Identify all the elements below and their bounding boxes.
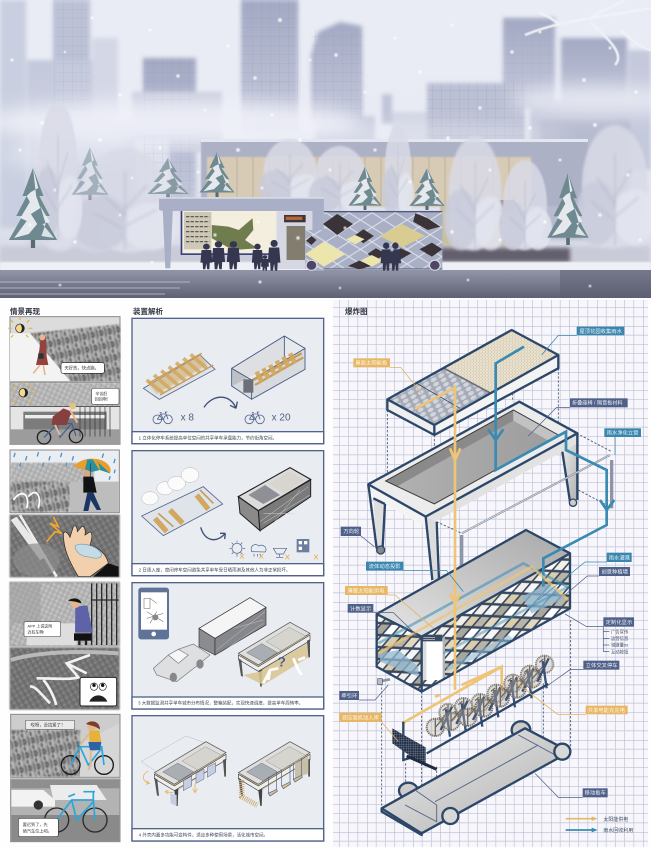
label: film solar: 薄膜太阳能供电 — [347, 586, 385, 594]
label: stacked parking: 立体交叉停车 — [586, 661, 618, 669]
comic: broken bike — [10, 648, 119, 709]
label: count display — [348, 604, 373, 613]
container body with lattice facade — [377, 530, 570, 692]
label: film solar — [345, 586, 388, 595]
label: mobile flatbed: 移动板车 — [585, 789, 607, 797]
panel 4: convertible components: 4 外壳内置多功能可变构件，适应多种使用场景，活化城市空间。 — [139, 832, 268, 839]
rain purification pipe — [462, 455, 612, 567]
panel 1: stacked parking: x 8 — [181, 412, 194, 423]
panel 3: truck scheduling: ? — [277, 654, 286, 670]
rainwater pipeline (blue) — [378, 347, 614, 653]
label: roof garden: 屋顶花园收集雨水 — [579, 327, 623, 335]
snowy kerb and road — [0, 262, 651, 298]
comic: hot day bike row — [8, 317, 120, 381]
comic: girl riding blue bike — [11, 714, 120, 777]
label: custom display with list: 定制化显示 — [606, 618, 632, 626]
projection dashes — [382, 368, 612, 833]
long background building — [201, 139, 588, 253]
label: shared charging: 共享电能充充电 — [588, 706, 626, 714]
snow trees and hedge — [0, 102, 651, 264]
panel: exploded view background grid — [333, 300, 648, 847]
comic column 1 and 2 — [8, 317, 120, 577]
falling snowflakes — [10, 16, 641, 289]
label: roof solar panel: 屋面太阳能板 — [355, 359, 388, 367]
label: hydraulic pump: 液压泵机动入库 — [342, 713, 380, 721]
label: traction hook — [339, 691, 359, 700]
label: rain purification: 雨水净化立管 — [607, 429, 639, 437]
label: custom display with list: 骑蹭量xx — [611, 642, 629, 649]
label: roof solar panel — [353, 358, 390, 367]
legend — [566, 816, 633, 834]
label: rain purification — [604, 428, 641, 437]
panel 2: indoor storage — [132, 451, 324, 576]
rooftop slab with solar and garden — [387, 330, 558, 435]
middle frame: shelter roof shell — [368, 402, 577, 580]
label: custom display with list — [603, 617, 634, 655]
comic: man with app: 近有车啊! — [27, 629, 44, 635]
bike rack with stacked bikes — [378, 656, 553, 769]
label: mobile flatbed — [583, 788, 608, 797]
label: universal wheel: 万向轮 — [343, 527, 360, 535]
panel 2: indoor storage: 2 日逐入库，密闭停车空间避免共享单车受日晒雨淋及其他人为非正常损坏。 — [139, 566, 290, 573]
comic: wet bike seat and hand — [10, 515, 119, 577]
label: rain irrigation — [607, 553, 632, 562]
label: shared charging — [586, 706, 628, 714]
label: custom display with list: 运营信息 — [611, 635, 629, 642]
comic: cyclist in heat — [10, 381, 120, 444]
panel 1: stacked parking — [132, 318, 324, 444]
solar power pipeline (yellow) — [378, 387, 568, 723]
panel 1: stacked parking: 1 立体化停车系统提高单位空间的共享单车承载能力，节约街角空间。 — [139, 434, 277, 441]
heading: exploded view: 爆炸图 — [345, 306, 368, 316]
comic: girl riding blue bike: 哎呀，没拉紧了！ — [31, 722, 65, 729]
device analysis panels — [132, 318, 324, 576]
comic: rain and wet bikes — [10, 450, 119, 513]
label: fluid projection: 流体动态投影 — [369, 562, 401, 570]
label: custom display with list: 互动按钮 — [611, 648, 629, 655]
label: planting wall — [599, 567, 630, 576]
comic: bike parked in car space: 骑汽车位上吧。 — [23, 827, 52, 833]
panel 3: truck scheduling: 3 大数据监测共享单车城市分布情况，整箱装配，实现快速调度，提高单车周转率。 — [138, 699, 303, 706]
label: count display: 计数显示 — [350, 604, 371, 612]
panel: scene recreation comics heading: 情景再现 — [10, 306, 40, 316]
leader lines — [359, 335, 615, 797]
label: roof garden — [577, 327, 624, 335]
comic: bike parked in car space — [11, 779, 120, 842]
label: planting wall: 创意种植墙 — [601, 567, 629, 575]
comic: cyclist in heat: 辛苦赶 — [95, 390, 107, 396]
label: folding seats — [570, 398, 628, 407]
comic: cyclist in heat: 回回啊！ — [95, 397, 111, 402]
branches at top right — [525, 0, 651, 65]
silhouettes of people waiting — [200, 240, 401, 271]
label: fluid projection — [366, 562, 403, 571]
legend: 雨水回收利用 — [603, 827, 633, 834]
label: universal wheel — [341, 527, 361, 536]
label: folding seats: 折叠座椅 / 隔音板衬料 — [572, 399, 623, 407]
comic: man with app: APP 上说这附 — [27, 623, 52, 629]
panel 3: truck scheduling — [132, 583, 324, 709]
bus-stop style bike shelter — [159, 197, 442, 271]
patterned container with diamond panels — [305, 211, 442, 270]
comic: bike parked in car space: 要迟到了，先 — [23, 821, 48, 827]
panel: device analysis heading: 装置解析 — [133, 306, 163, 316]
comic: hot day bike row: 天好热，快点跑。 — [64, 365, 99, 372]
comic: man with app — [10, 582, 119, 646]
label: hydraulic pump — [339, 713, 382, 722]
exploded axonometric drawing — [339, 327, 641, 835]
label: custom display with list: 广告宣传 — [611, 628, 629, 635]
panel 1: stacked parking: x 20 — [272, 412, 291, 423]
moving flatbed platform — [382, 721, 570, 835]
panel 4: convertible components — [132, 716, 324, 841]
label: traction hook: 牵引环 — [341, 691, 358, 699]
label: stacked parking — [583, 661, 619, 670]
hero scene: snowy city street with bike shelter — [0, 0, 651, 298]
label: rain irrigation: 雨水灌溉 — [609, 553, 631, 561]
legend: 太阳能供电 — [603, 816, 628, 823]
